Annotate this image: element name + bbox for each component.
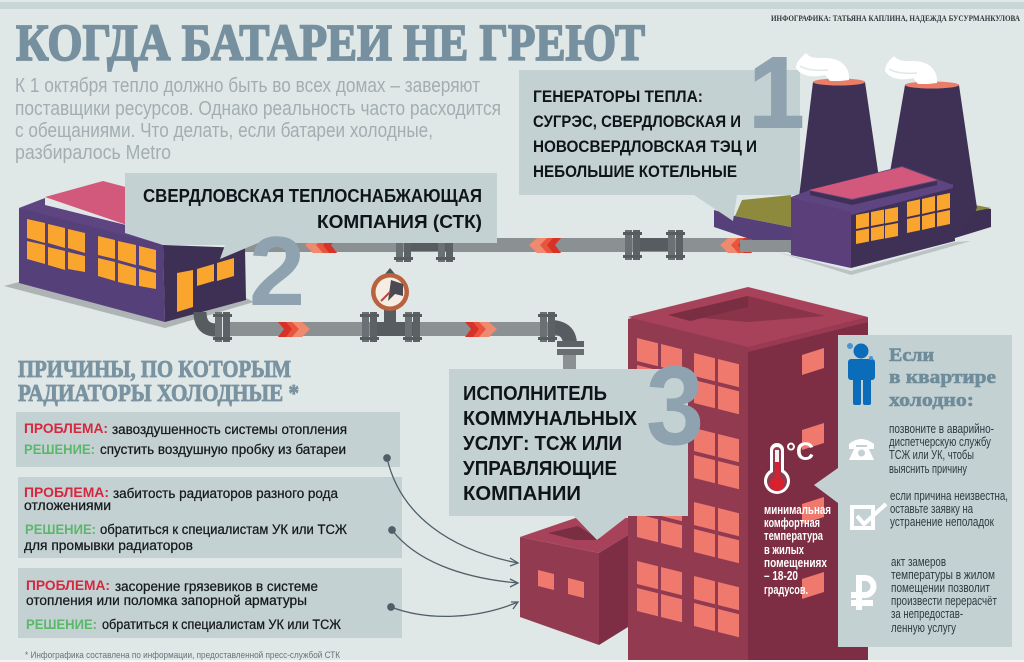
- icon: thermometer: [764, 438, 814, 494]
- number 3: 3: [646, 343, 704, 468]
- callout 1: heat generators: ГЕНЕРАТОРЫ ТЕПЛА:: [533, 88, 703, 106]
- panel: problem 3: отопления или поломка запорной арматуры: [26, 593, 307, 608]
- text: recalculation: температуры в жилом: [891, 567, 995, 582]
- text: recalculation: за непредостав-: [891, 606, 963, 621]
- min temperature text: температура: [764, 528, 824, 543]
- callout 3: service companies: УПРАВЛЯЮЩИЕ: [463, 457, 617, 480]
- min temperature text: минимальная: [764, 502, 831, 517]
- panel: problem 1: ПРОБЛЕМА:: [24, 420, 108, 436]
- text: call: позвоните в аварийно-: [889, 421, 994, 436]
- panel: if the flat is cold: [814, 335, 1012, 647]
- callout 1: heat generators: [519, 70, 800, 221]
- panel: problem 2: отложениями: [24, 498, 111, 513]
- callout 2: heat company: КОМПАНИЯ (СТК): [317, 211, 482, 232]
- callout 1: heat generators: СУГРЭС, СВЕРДЛОВСКАЯ И: [533, 113, 741, 131]
- lower pipe with gauge: [200, 268, 584, 370]
- number 1: 1: [749, 37, 804, 149]
- heading: if cold: Если: [889, 345, 934, 366]
- panel: problem 2: [18, 477, 402, 558]
- title: КОГДА БАТАРЕИ НЕ ГРЕЮТ: [16, 15, 645, 72]
- panel: problem 1: [16, 412, 400, 467]
- callout 1: heat generators: НЕБОЛЬШИЕ КОТЕЛЬНЫЕ: [533, 163, 737, 181]
- icon: pressure gauge: [371, 268, 409, 311]
- tall house: [628, 287, 868, 660]
- panel: problem 2: РЕШЕНИЕ:: [25, 521, 96, 537]
- text: call: выяснить причину: [889, 461, 967, 476]
- panel: problem 2: для промывки радиаторов: [24, 538, 193, 553]
- panel: problem 3: РЕШЕНИЕ:: [26, 616, 97, 632]
- intro text: с обещаниями. Что делать, если батареи холодные,: [15, 120, 433, 142]
- icon: phone: [849, 439, 874, 460]
- panel: problem 1: спустить воздушную пробку из батареи: [100, 442, 346, 457]
- callout 1: heat generators: НОВОСВЕРДЛОВСКАЯ ТЭЦ И: [533, 138, 757, 156]
- icon: checkbox: [852, 504, 886, 528]
- callout 2: heat company: СВЕРДЛОВСКАЯ ТЕПЛОСНАБЖАЮЩАЯ: [143, 185, 482, 206]
- icon: thermometer: °C: [786, 438, 814, 466]
- panel: problem 2: забитость радиаторов разного рода: [113, 486, 338, 501]
- intro text: К 1 октября тепло должно быть во всех домах – заверяют: [15, 75, 480, 97]
- text: recalculation: помещении позволит: [891, 580, 990, 595]
- text: call: ТСЖ или УК, чтобы: [889, 447, 974, 462]
- panel: problem 2: ПРОБЛЕМА:: [24, 484, 109, 500]
- callout 3: service companies: КОММУНАЛЬНЫХ: [463, 407, 637, 430]
- panel: problem 1: завоздушенность системы отопления: [112, 422, 347, 437]
- heading: if cold: холодно:: [889, 390, 974, 411]
- min temperature text: комфортная: [764, 515, 820, 530]
- intro text: поставщики ресурсов. Однако реальность часто расходится: [15, 98, 501, 120]
- upper pipe: [245, 230, 795, 262]
- min temperature text: [764, 502, 831, 597]
- factory back part: [714, 195, 991, 253]
- factory with chimneys: [777, 53, 977, 275]
- panel: problem 3: ПРОБЛЕМА:: [26, 577, 110, 593]
- min temperature text: градусов.: [764, 582, 808, 597]
- min temperature text: помещениях: [764, 555, 828, 570]
- callout 3: service companies: [449, 369, 688, 540]
- heading: reasons: [18, 357, 299, 407]
- chimney right: [885, 56, 977, 238]
- callout 2: heat company: [125, 173, 497, 259]
- heading: reasons: РАДИАТОРЫ ХОЛОДНЫЕ *: [18, 381, 299, 407]
- panel: problem 3: [18, 568, 402, 638]
- panel: problem 3: засорение грязевиков в системе: [115, 579, 318, 594]
- text: recalculation: [891, 554, 997, 635]
- heading: if cold: [889, 345, 996, 411]
- callout 3: service companies: УСЛУГ: ТСЖ ИЛИ: [463, 432, 622, 455]
- text: request: оставьте заявку на: [890, 501, 974, 516]
- footnote: * Инфографика составлена по информации, предоставленной пресс-службой СТК: [25, 650, 340, 661]
- intro text: разбиралось Metro: [15, 142, 171, 164]
- number 2: 2: [249, 216, 305, 326]
- icon: ruble: [851, 578, 874, 610]
- text: request: устранение неполадок: [890, 514, 994, 529]
- panel: problem 1: РЕШЕНИЕ:: [24, 441, 95, 457]
- text: call: [889, 421, 994, 476]
- min temperature text: в жилых: [764, 542, 805, 557]
- heading: if cold: в квартире: [889, 367, 996, 388]
- chimney left: [796, 53, 879, 197]
- callout 3: service companies: КОМПАНИИ: [463, 482, 581, 505]
- panel: problem 2: обратиться к специалистам УК или ТСЖ: [100, 522, 348, 537]
- building: heat company: [4, 181, 254, 328]
- panel: problem 3: обратиться к специалистам УК или ТСЖ: [102, 617, 341, 632]
- text: call: диспетчерскую службу: [889, 434, 991, 449]
- connectors from problems to the house: [384, 455, 518, 616]
- heading: reasons: ПРИЧИНЫ, ПО КОТОРЫМ: [18, 357, 291, 383]
- intro text: [15, 75, 501, 164]
- text: recalculation: акт замеров: [891, 554, 946, 569]
- text: recalculation: ленную услугу: [891, 620, 956, 635]
- callout 3: service companies: ИСПОЛНИТЕЛЬ: [463, 382, 607, 405]
- icon: cold person: [847, 343, 875, 405]
- small house: [520, 513, 628, 645]
- min temperature text: – 18-20: [764, 568, 798, 583]
- text: request: [890, 488, 1008, 529]
